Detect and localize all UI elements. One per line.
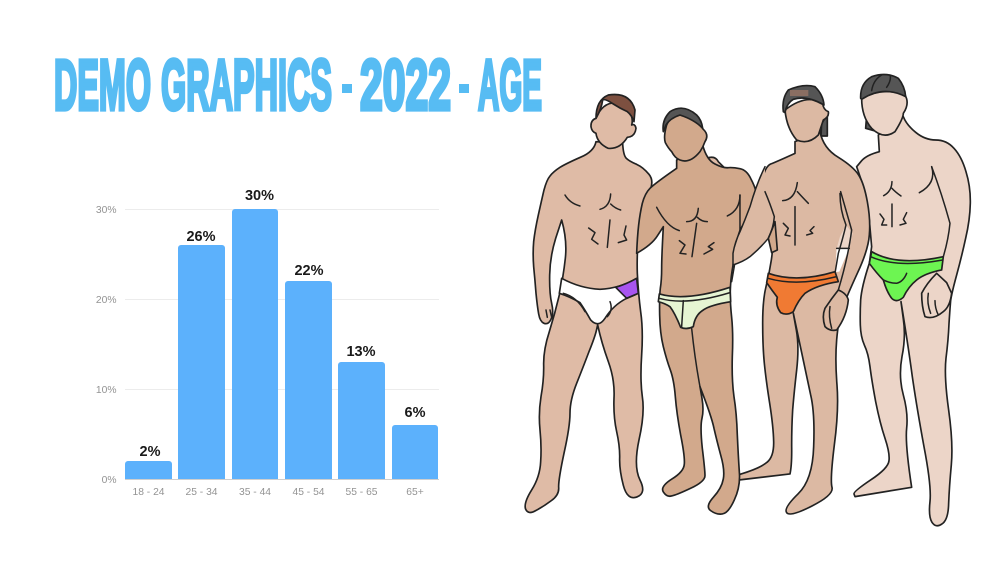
y axis labels: 30% bbox=[96, 205, 116, 216]
x axis labels: 55 - 65 bbox=[345, 487, 378, 498]
figure: man 2, dark hair, pale green briefs bbox=[637, 108, 756, 514]
x axis labels: 25 - 34 bbox=[185, 487, 218, 498]
bar value labels bbox=[140, 188, 426, 460]
bar value labels: 2% bbox=[140, 444, 161, 460]
y axis labels: 10% bbox=[96, 385, 116, 396]
bar value labels: 6% bbox=[405, 405, 426, 421]
bar value labels: 26% bbox=[186, 229, 216, 245]
figure: man 4, light skin, green briefs bbox=[837, 75, 970, 526]
title: DEMO bbox=[54, 46, 151, 126]
text: AGE bbox=[478, 46, 542, 126]
figure: man 3 arm reaching across bbox=[733, 167, 777, 265]
y axis labels bbox=[96, 205, 116, 486]
gap between torso and right arm bbox=[837, 225, 853, 248]
x axis labels: 35 - 44 bbox=[239, 487, 271, 498]
bars bbox=[125, 209, 438, 479]
bar value labels: 13% bbox=[346, 344, 376, 360]
y axis labels: 0% bbox=[102, 475, 116, 486]
bar chart: age distribution bbox=[96, 188, 439, 498]
y axis labels: 20% bbox=[96, 295, 116, 306]
figure: man 3 body, cap, orange briefs bbox=[733, 86, 870, 514]
figure: man 1, brown hair, white and purple briefs bbox=[525, 94, 724, 513]
x axis labels: 65+ bbox=[406, 487, 424, 498]
x axis labels bbox=[132, 487, 424, 498]
illustration: four men standing together in colourful briefs bbox=[525, 75, 970, 526]
x axis labels: 45 - 54 bbox=[292, 487, 325, 498]
x axis labels: 18 - 24 bbox=[132, 487, 165, 498]
title: 2022 bbox=[360, 46, 451, 126]
title: GRAPHICS bbox=[161, 46, 332, 126]
bar value labels: 22% bbox=[294, 263, 324, 279]
bar value labels: 30% bbox=[245, 188, 274, 204]
